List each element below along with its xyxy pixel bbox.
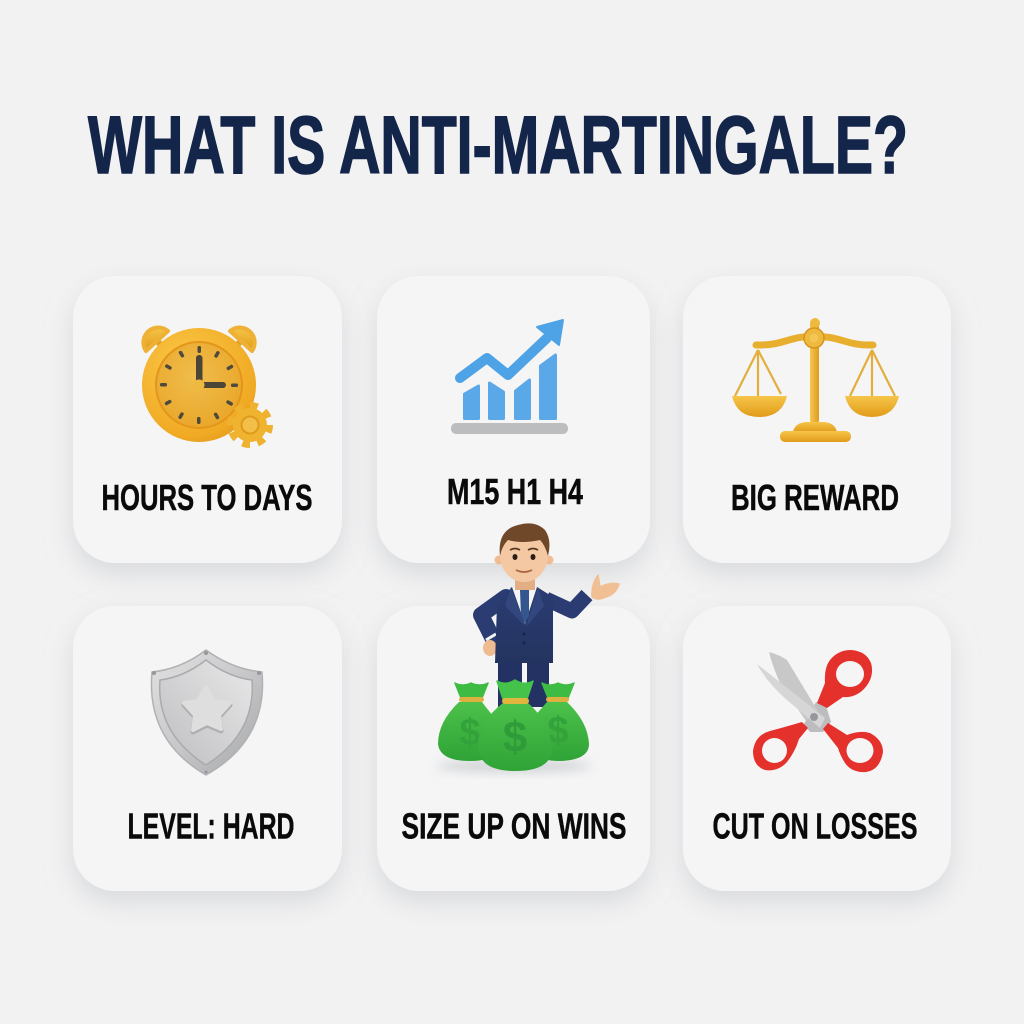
icon: golden scales <box>732 318 899 442</box>
icon: red scissors <box>753 650 883 772</box>
figure: businessman with money bags <box>436 523 619 773</box>
label: SIZE UP ON WINS <box>402 806 626 846</box>
icon: silver shield with star <box>151 650 263 775</box>
panel: level hard <box>73 606 342 891</box>
icon: alarm clock with gear <box>142 327 270 444</box>
icon: rising bar chart <box>451 320 568 434</box>
label: HOURS TO DAYS <box>102 477 312 518</box>
money bag right: $ <box>547 710 569 752</box>
panel: cut on losses <box>683 606 951 891</box>
panel: timeframes <box>377 276 650 563</box>
money bag left <box>438 683 498 761</box>
icon: gear <box>230 406 270 444</box>
panel: big reward <box>683 276 951 563</box>
label: M15 H1 H4 <box>447 471 584 512</box>
money bag right <box>530 683 589 761</box>
panel: hours to days <box>73 276 342 563</box>
money bag centre <box>478 680 552 771</box>
panel: size up on wins <box>377 606 650 891</box>
label: CUT ON LOSSES <box>712 806 918 846</box>
label: LEVEL: HARD <box>128 806 294 846</box>
money bag left: $ <box>459 712 481 754</box>
money bag centre: $ <box>503 713 527 762</box>
label: BIG REWARD <box>731 477 899 518</box>
businessman <box>481 523 619 707</box>
